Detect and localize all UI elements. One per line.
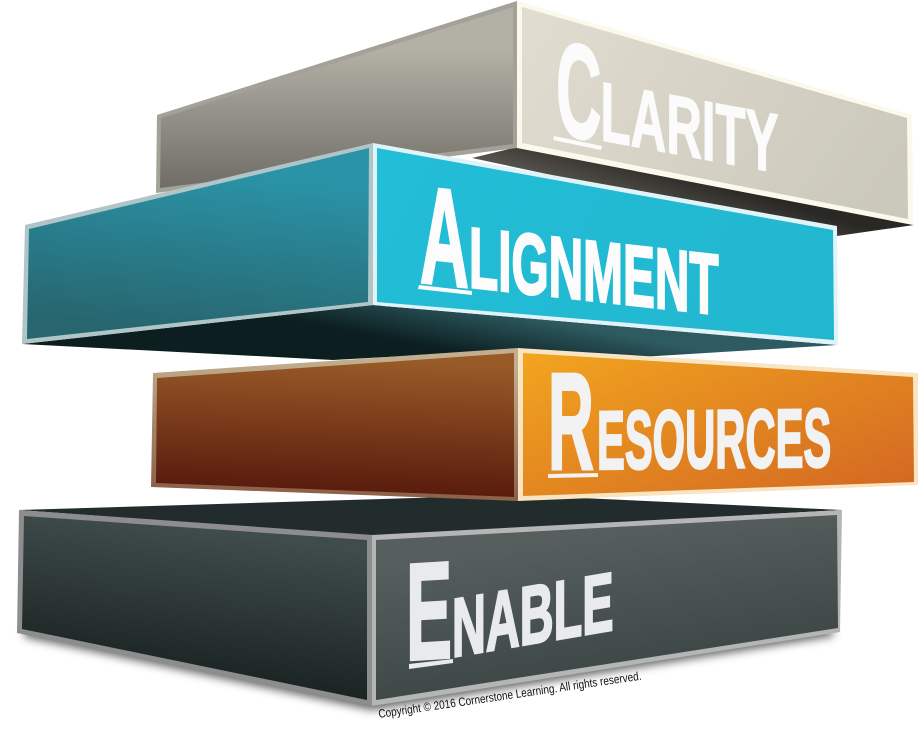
block: Alignment — [22, 143, 838, 360]
Resources label — [548, 344, 831, 499]
Clarity label — [553, 13, 778, 191]
Enable drop shadow — [24, 600, 834, 710]
Alignment front face — [373, 143, 838, 345]
Clarity underside — [472, 147, 914, 236]
block: Clarity — [156, 1, 914, 236]
Clarity left face — [156, 1, 517, 193]
Alignment left face — [22, 143, 373, 344]
Enable label — [406, 533, 613, 690]
Resources front face — [518, 348, 918, 501]
Resources label: R — [548, 344, 594, 499]
Resources left face — [151, 348, 518, 501]
block: Enable — [17, 495, 842, 710]
Clarity label: C — [556, 13, 601, 171]
block: Resources — [151, 344, 918, 501]
Enable top face — [19, 495, 842, 536]
Enable label: NABLE — [452, 556, 613, 675]
Alignment underside — [22, 305, 837, 360]
Alignment label — [418, 159, 719, 333]
Alignment label: LIGNMENT — [469, 209, 719, 333]
Enable label: E — [406, 533, 452, 690]
Enable front face — [372, 510, 842, 706]
Clarity front face — [517, 1, 913, 225]
Clarity label: LARITY — [600, 64, 778, 191]
Resources label: ESOURCES — [597, 392, 831, 487]
copyright note: Copyright © 2016 Cornerstone Learning. All rights reserved. — [378, 670, 642, 721]
Enable left face — [17, 510, 373, 706]
Alignment label: A — [420, 159, 469, 318]
